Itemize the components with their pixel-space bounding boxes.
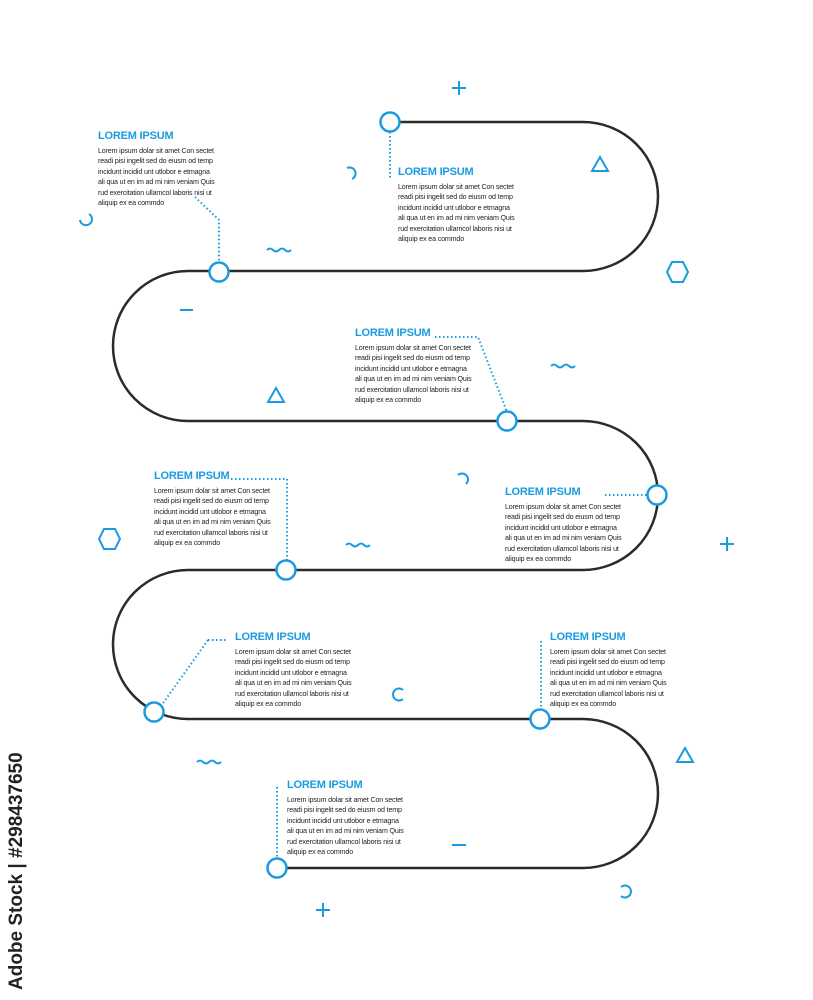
text block 5: ali qua ut en im ad mi nim veniam Quis — [505, 534, 622, 542]
text block 4: incidunt incidid unt utlobor e etmagna — [154, 508, 266, 516]
text block 4: ali qua ut en im ad mi nim veniam Quis — [154, 518, 271, 526]
text block 2: aliquip ex ea commdo — [398, 235, 464, 243]
text block 1: rud exercitation ullamcol laboris nisi ut — [98, 189, 212, 197]
text block 3: readi pisi ingelit sed do eiusm od temp — [355, 354, 470, 362]
text block 2: LOREM IPSUM — [398, 166, 473, 178]
text block 7: ali qua ut en im ad mi nim veniam Quis — [550, 679, 667, 687]
text block 5: incidunt incidid unt utlobor e etmagna — [505, 524, 617, 532]
text block 1: aliquip ex ea commdo — [98, 199, 164, 207]
text block 6: readi pisi ingelit sed do eiusm od temp — [235, 658, 350, 666]
text block 2: Lorem ipsum dolar sit amet Con sectet — [398, 183, 514, 191]
text block 7: readi pisi ingelit sed do eiusm od temp — [550, 658, 665, 666]
text block 1: readi pisi ingelit sed do eiusm od temp — [98, 157, 213, 165]
text block 8: ali qua ut en im ad mi nim veniam Quis — [287, 827, 404, 835]
text block 7: LOREM IPSUM — [550, 631, 625, 643]
text block 4 — [154, 470, 271, 547]
text block 5: aliquip ex ea commdo — [505, 555, 571, 563]
text block 1: ali qua ut en im ad mi nim veniam Quis — [98, 178, 215, 186]
text block 7: incidunt incidid unt utlobor e etmagna — [550, 669, 662, 677]
text block 4: aliquip ex ea commdo — [154, 539, 220, 547]
text block 4: readi pisi ingelit sed do eiusm od temp — [154, 497, 269, 505]
text block 5: readi pisi ingelit sed do eiusm od temp — [505, 513, 620, 521]
text block 4: LOREM IPSUM — [154, 470, 229, 482]
text block 2: incidunt incidid unt utlobor e etmagna — [398, 204, 510, 212]
text block 8: incidunt incidid unt utlobor e etmagna — [287, 817, 399, 825]
text block 3: LOREM IPSUM — [355, 327, 430, 339]
text block 1: Lorem ipsum dolar sit amet Con sectet — [98, 147, 214, 155]
text block 5: Lorem ipsum dolar sit amet Con sectet — [505, 503, 621, 511]
text block 6: incidunt incidid unt utlobor e etmagna — [235, 669, 347, 677]
text block 2: readi pisi ingelit sed do eiusm od temp — [398, 193, 513, 201]
text block 6: rud exercitation ullamcol laboris nisi ut — [235, 690, 349, 698]
text block 5: rud exercitation ullamcol laboris nisi ut — [505, 545, 619, 553]
text block 3: Lorem ipsum dolar sit amet Con sectet — [355, 344, 471, 352]
text block 2: rud exercitation ullamcol laboris nisi ut — [398, 225, 512, 233]
text block 6: LOREM IPSUM — [235, 631, 310, 643]
text block 3: incidunt incidid unt utlobor e etmagna — [355, 365, 467, 373]
watermark: Adobe Stock | #298437650 — [6, 752, 27, 990]
text block 4: Lorem ipsum dolar sit amet Con sectet — [154, 487, 270, 495]
text block 8: Lorem ipsum dolar sit amet Con sectet — [287, 796, 403, 804]
winding path — [113, 122, 658, 868]
text block 3: aliquip ex ea commdo — [355, 396, 421, 404]
text block 6: ali qua ut en im ad mi nim veniam Quis — [235, 679, 352, 687]
text block 8 — [287, 779, 404, 856]
text block 3 — [355, 327, 472, 404]
text block 5 — [505, 486, 622, 563]
text block 2 — [398, 166, 515, 243]
text block 7: rud exercitation ullamcol laboris nisi ut — [550, 690, 664, 698]
text block 8: rud exercitation ullamcol laboris nisi ut — [287, 838, 401, 846]
text block 6 — [235, 631, 352, 708]
text block 2: ali qua ut en im ad mi nim veniam Quis — [398, 214, 515, 222]
text block 6: aliquip ex ea commdo — [235, 700, 301, 708]
dotted connectors — [161, 132, 647, 859]
text block 5: LOREM IPSUM — [505, 486, 580, 498]
text block 4: rud exercitation ullamcol laboris nisi ut — [154, 529, 268, 537]
text block 3: rud exercitation ullamcol laboris nisi ut — [355, 386, 469, 394]
text block 8: readi pisi ingelit sed do eiusm od temp — [287, 806, 402, 814]
text block 3: ali qua ut en im ad mi nim veniam Quis — [355, 375, 472, 383]
text block 1 — [98, 130, 215, 207]
text block 7: Lorem ipsum dolar sit amet Con sectet — [550, 648, 666, 656]
text block 6: Lorem ipsum dolar sit amet Con sectet — [235, 648, 351, 656]
milestone circles — [144, 112, 666, 878]
text block 8: LOREM IPSUM — [287, 779, 362, 791]
text block 1: LOREM IPSUM — [98, 130, 173, 142]
text block 7 — [550, 631, 667, 708]
text block 7: aliquip ex ea commdo — [550, 700, 616, 708]
decorations — [80, 81, 734, 917]
text block 1: incidunt incidid unt utlobor e etmagna — [98, 168, 210, 176]
text block 8: aliquip ex ea commdo — [287, 848, 353, 856]
